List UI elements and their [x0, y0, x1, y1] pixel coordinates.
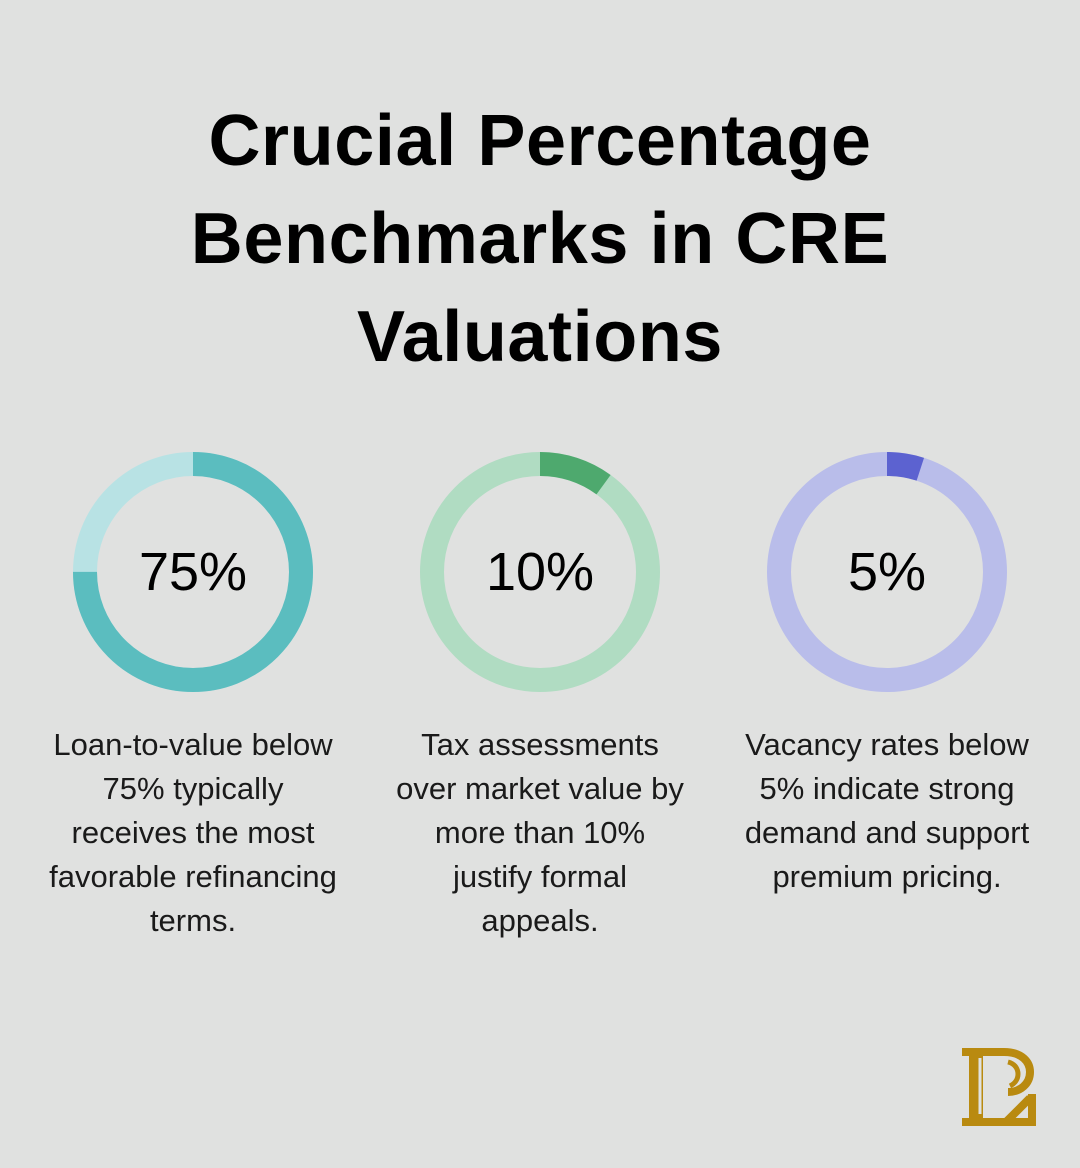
text: tax assessments [396, 727, 684, 938]
title: Benchmarks in CRE [191, 199, 889, 279]
text: vacancy rates: 5% indicate strong [759, 771, 1015, 806]
donut: 75%: 75% [139, 542, 247, 602]
text: loan-to-value: 75% typically [103, 771, 283, 806]
title [191, 101, 889, 377]
donut: 5%: 5% [848, 542, 926, 602]
title: Valuations [357, 297, 723, 377]
text: vacancy rates [745, 727, 1029, 894]
text: vacancy rates: Vacancy rates below [745, 727, 1029, 762]
donut: 5% [767, 452, 1007, 692]
title: Crucial Percentage [208, 101, 872, 181]
donut: 75% [73, 452, 313, 692]
text: tax assessments: over market value by [396, 771, 684, 806]
text: tax assessments: more than 10% [435, 815, 645, 850]
text: vacancy rates: demand and support [745, 815, 1029, 850]
text: loan-to-value: receives the most [72, 815, 314, 850]
text: loan-to-value: Loan-to-value below [53, 727, 333, 762]
text: loan-to-value [49, 727, 337, 938]
logo [962, 1048, 1036, 1126]
text: loan-to-value: favorable refinancing [49, 859, 337, 894]
text: vacancy rates: premium pricing. [772, 859, 1002, 894]
donut: 10% [420, 452, 660, 692]
donut: 10%: 10% [486, 542, 594, 602]
text: tax assessments: appeals. [481, 903, 599, 938]
text: loan-to-value: terms. [150, 903, 236, 938]
text: tax assessments: Tax assessments [421, 727, 659, 762]
text: tax assessments: justify formal [453, 859, 627, 894]
